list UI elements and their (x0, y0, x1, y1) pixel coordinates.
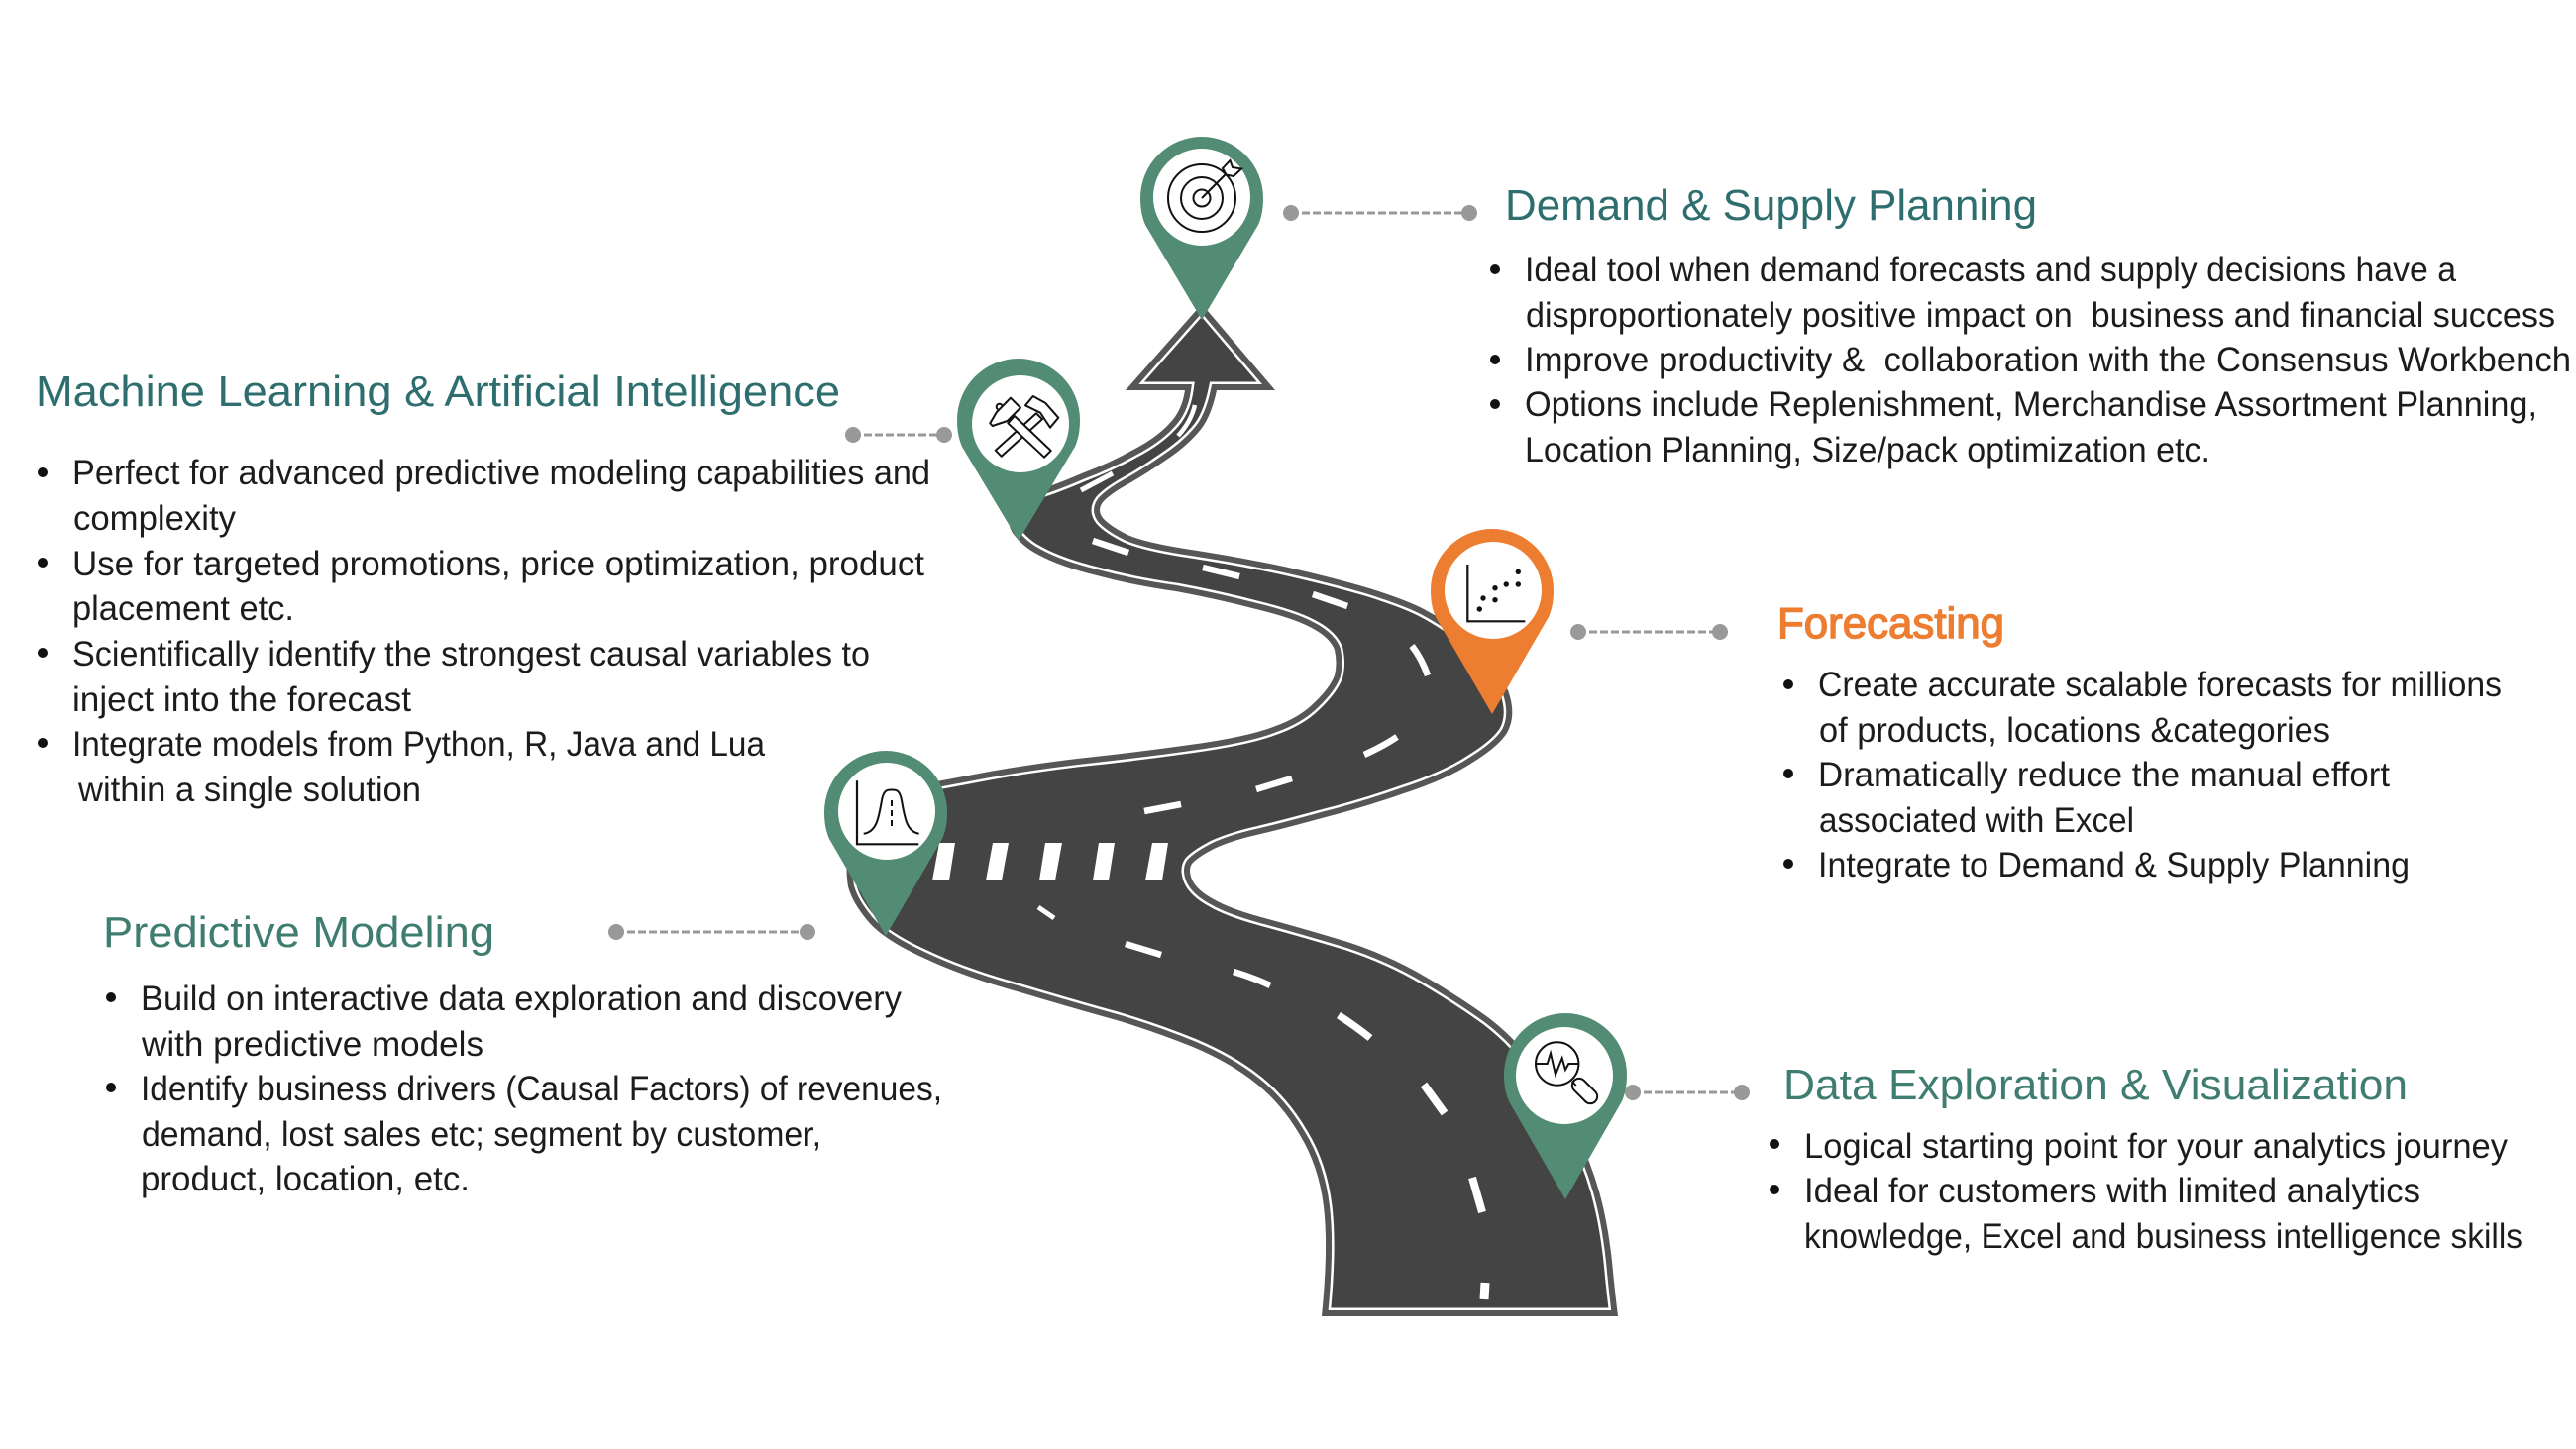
icon: magnifier with signal (1536, 1042, 1600, 1106)
pin: machine learning (957, 359, 1080, 541)
pin: data exploration (1504, 1013, 1627, 1199)
panel: forecasting (1777, 599, 2502, 884)
connector: machine learning (845, 427, 952, 443)
panel: data exploration and visualization (1770, 1061, 2522, 1256)
bullet list: predictive modeling: product, location, etc. (141, 1160, 470, 1198)
bullet list: machine learning: Use for targeted promotions, price optimization, product (72, 545, 924, 583)
bullet list: demand and supply planning: Options include Replenishment, Merchandise Assortment Planning, (1525, 385, 2537, 424)
connector: forecasting (1570, 624, 1728, 640)
icon: bell curve (857, 780, 919, 844)
bullet list: forecasting: of products, locations &categories (1819, 711, 2330, 750)
heading: demand and supply planning: Demand & Supply Planning (1505, 181, 2037, 230)
bullet list: forecasting: Integrate to Demand & Supply Planning (1818, 846, 2410, 884)
bullet list: machine learning: within a single solution (77, 771, 421, 809)
connector: predictive modeling (608, 924, 815, 940)
bullet list: predictive modeling: Identify business drivers (Causal Factors) of revenues, (141, 1070, 942, 1108)
bullet list: demand and supply planning: Location Planning, Size/pack optimization etc. (1525, 431, 2210, 469)
lane dashes (1038, 405, 1485, 1299)
bullet list: machine learning: Perfect for advanced predictive modeling capabilities and (72, 454, 930, 492)
heading: forecasting: Forecasting (1777, 599, 2004, 648)
bullet list: forecasting (1783, 666, 2502, 884)
bullet list: predictive modeling (106, 980, 942, 1198)
bullet list: predictive modeling: demand, lost sales etc; segment by customer, (142, 1115, 821, 1154)
bullet list: machine learning: inject into the forecast (72, 680, 411, 719)
heading: machine learning and artificial intelligence: Machine Learning & Artificial Intelligence (36, 367, 840, 416)
bullet list: data exploration (1770, 1127, 2522, 1256)
bullet list: demand and supply planning: Improve productivity & collaboration with the Consensus Workbench (1525, 341, 2571, 379)
bullet list: data exploration: Ideal for customers with limited analytics (1804, 1172, 2420, 1210)
panel: demand and supply planning (1490, 181, 2571, 469)
panel: predictive modeling (103, 908, 942, 1198)
pin: demand and supply planning (1140, 137, 1263, 320)
icon: crossed hammers (990, 396, 1058, 458)
bullet list: machine learning (38, 454, 930, 809)
panel: machine learning and artificial intelligence (36, 367, 930, 809)
bullet list: demand and supply planning (1490, 251, 2571, 469)
bullet list: predictive modeling: Build on interactive data exploration and discovery (141, 980, 902, 1018)
connector: demand and supply planning (1283, 205, 1477, 221)
icon: scatter plot (1467, 565, 1525, 621)
bullet list: forecasting: Create accurate scalable forecasts for millions (1818, 666, 2502, 704)
bullet list: demand and supply planning: Ideal tool when demand forecasts and supply decisions have a (1525, 251, 2457, 289)
bullet list: machine learning: Scientifically identify the strongest causal variables to (72, 635, 870, 673)
heading: predictive modeling: Predictive Modeling (103, 908, 494, 957)
bullet list: forecasting: associated with Excel (1819, 801, 2134, 840)
pin: predictive modeling (824, 751, 947, 936)
crosswalk (932, 843, 1168, 880)
bullet list: data exploration: knowledge, Excel and business intelligence skills (1804, 1217, 2522, 1256)
road (846, 304, 1618, 1316)
road surface (846, 304, 1618, 1316)
pin: forecasting (1431, 529, 1554, 714)
bullet list: demand and supply planning: disproportionately positive impact on business and financial success (1526, 296, 2555, 335)
bullet list: data exploration: Logical starting point for your analytics journey (1804, 1127, 2508, 1166)
bullet list: machine learning: Integrate models from Python, R, Java and Lua (72, 725, 766, 764)
heading: data exploration and visualization: Data Exploration & Visualization (1783, 1061, 2408, 1109)
bullet list: machine learning: complexity (73, 499, 236, 538)
connector: data exploration (1625, 1085, 1750, 1100)
bullet list: machine learning: placement etc. (72, 589, 294, 628)
icon: target with arrow (1168, 160, 1241, 232)
bullet list: forecasting: Dramatically reduce the manual effort (1818, 756, 2390, 794)
bullet list: predictive modeling: with predictive models (141, 1025, 483, 1064)
